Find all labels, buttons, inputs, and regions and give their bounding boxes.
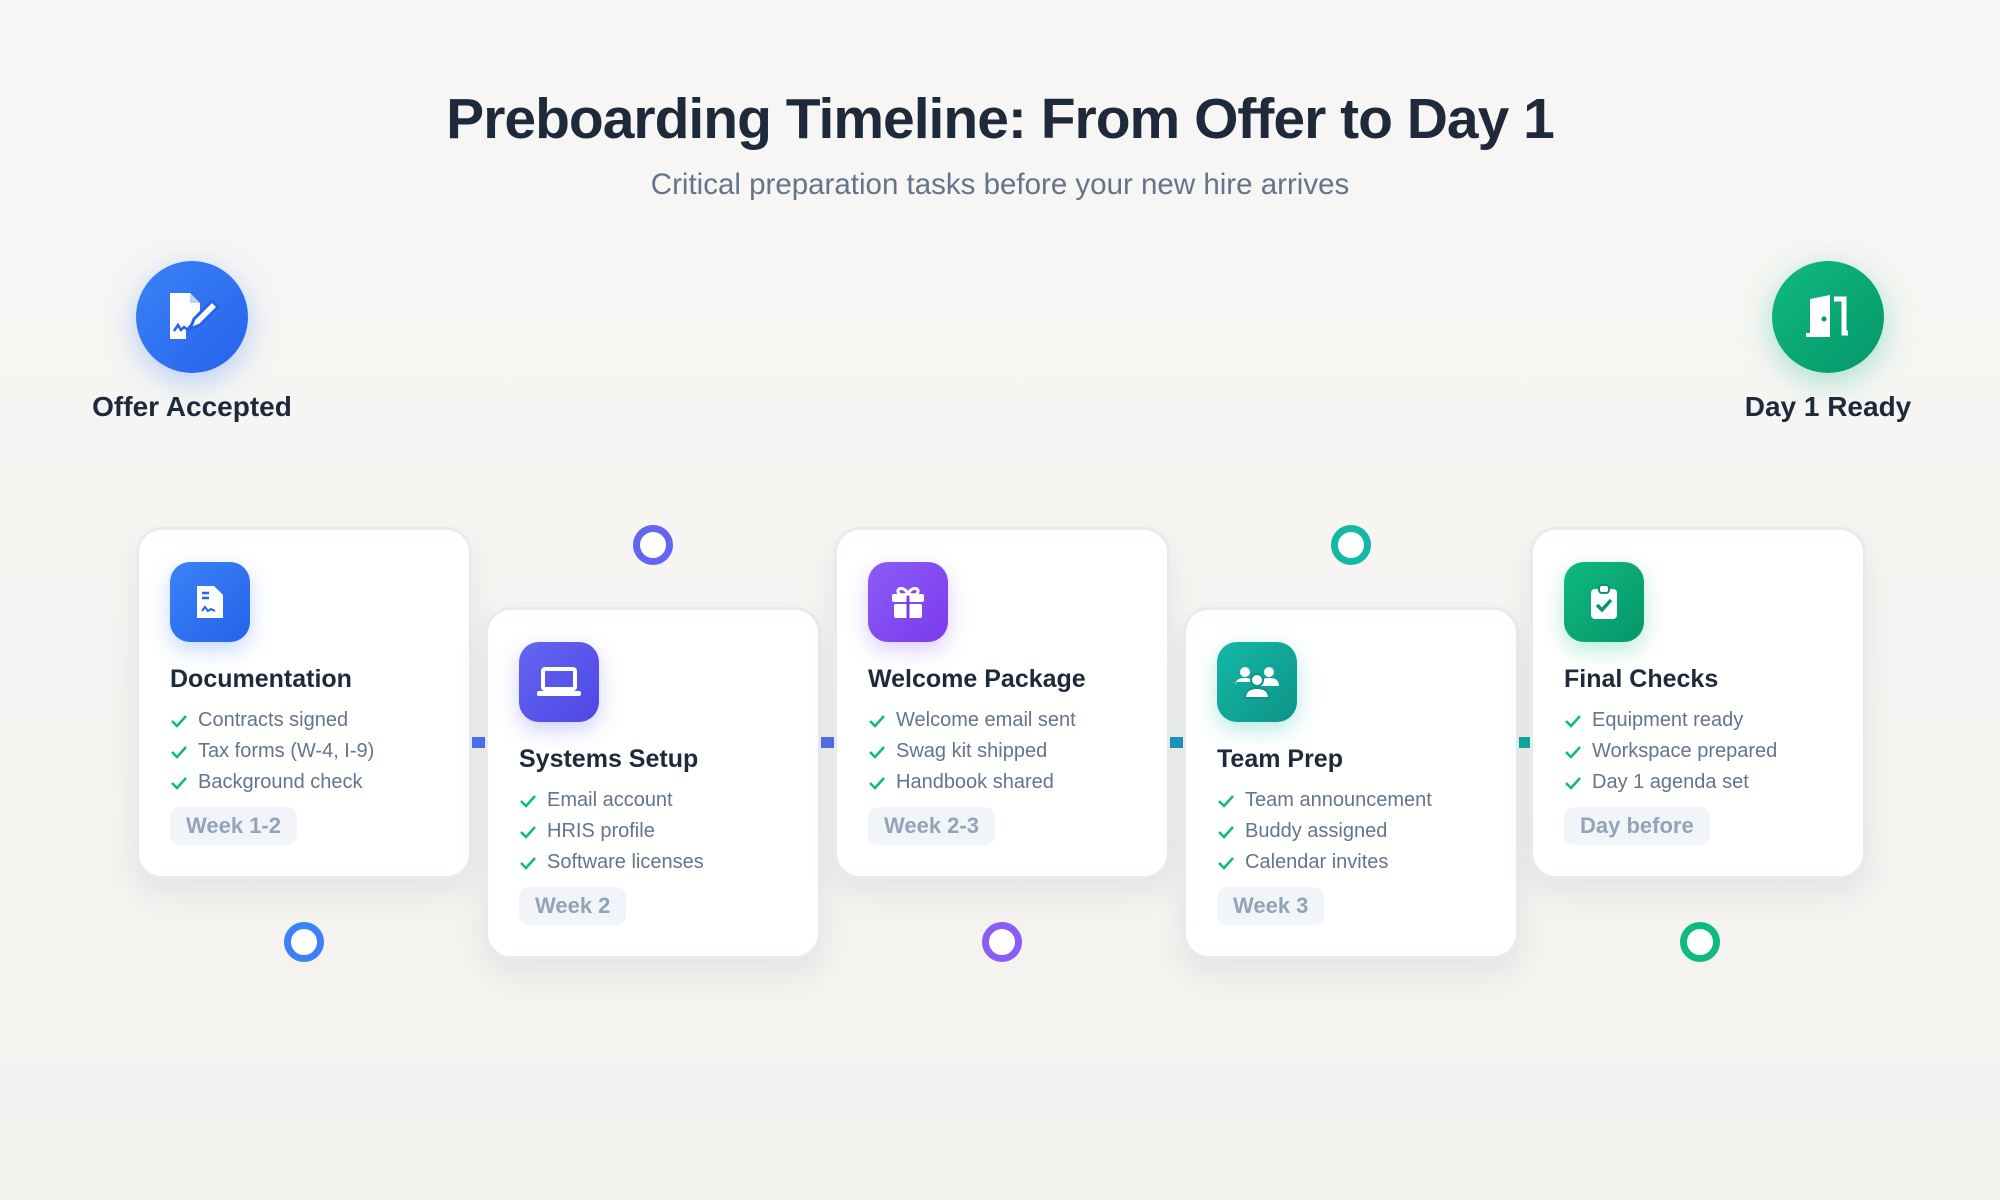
panel: final checks: Equipment ready xyxy=(1592,709,1743,731)
panel: documentation xyxy=(136,527,472,879)
panel: team prep: Team Prep xyxy=(1217,745,1343,773)
milestone: offer accepted: Offer Accepted xyxy=(92,391,292,422)
ring marker: welcome xyxy=(982,922,1022,962)
panel: team prep: Team announcement xyxy=(1245,789,1432,811)
icon: document xyxy=(170,562,250,642)
ring marker: systems xyxy=(633,525,673,565)
panel: team prep: Week 3 xyxy=(1233,893,1308,918)
icon: gift xyxy=(868,562,948,642)
panel: systems setup: Software licenses xyxy=(547,851,704,873)
panel: welcome package: Welcome email sent xyxy=(896,709,1076,731)
panel: systems setup: HRIS profile xyxy=(547,820,655,842)
panel: systems setup xyxy=(485,607,821,959)
panel: documentation: Documentation xyxy=(170,665,352,693)
milestone: day 1 ready: Day 1 Ready xyxy=(1745,391,1911,422)
title: Preboarding Timeline: From Offer to Day 1 xyxy=(446,87,1554,151)
panel: systems setup: Week 2 xyxy=(535,893,610,918)
panel: team prep: Buddy assigned xyxy=(1245,820,1387,842)
panel: welcome package: Swag kit shipped xyxy=(896,740,1047,762)
ring marker: documentation xyxy=(284,922,324,962)
panel: systems setup: Email account xyxy=(547,789,673,811)
panel: systems setup: Systems Setup xyxy=(519,745,698,773)
icon: clipboard check xyxy=(1564,562,1644,642)
icon: signed document xyxy=(136,261,248,373)
panel: final checks: Workspace prepared xyxy=(1592,740,1777,762)
panel: final checks: Day 1 agenda set xyxy=(1592,771,1749,793)
panel: documentation: Week 1-2 xyxy=(186,813,281,838)
subtitle: Critical preparation tasks before your new hire arrives xyxy=(651,168,1349,201)
panel: welcome package: Week 2-3 xyxy=(884,813,979,838)
ring marker: team xyxy=(1331,525,1371,565)
panel: documentation: Tax forms (W-4, I-9) xyxy=(198,740,374,762)
panel: welcome package: Welcome Package xyxy=(868,665,1086,693)
panel: final checks: Final Checks xyxy=(1564,665,1718,693)
panel: documentation: Contracts signed xyxy=(198,709,348,731)
icon: laptop xyxy=(519,642,599,722)
ring marker: final xyxy=(1680,922,1720,962)
icon: door xyxy=(1772,261,1884,373)
timeline line xyxy=(140,737,1860,748)
panel: welcome package: Handbook shared xyxy=(896,771,1054,793)
milestone: offer accepted xyxy=(92,254,292,422)
panel: team prep xyxy=(1183,607,1519,959)
milestone: day 1 ready xyxy=(1745,252,1911,422)
panel: final checks: Day before xyxy=(1580,813,1694,838)
icon: team xyxy=(1217,642,1297,722)
panel: welcome package xyxy=(834,527,1170,879)
panel: final checks xyxy=(1530,527,1866,879)
panel: team prep: Calendar invites xyxy=(1245,851,1388,873)
panel: documentation: Background check xyxy=(198,771,363,793)
